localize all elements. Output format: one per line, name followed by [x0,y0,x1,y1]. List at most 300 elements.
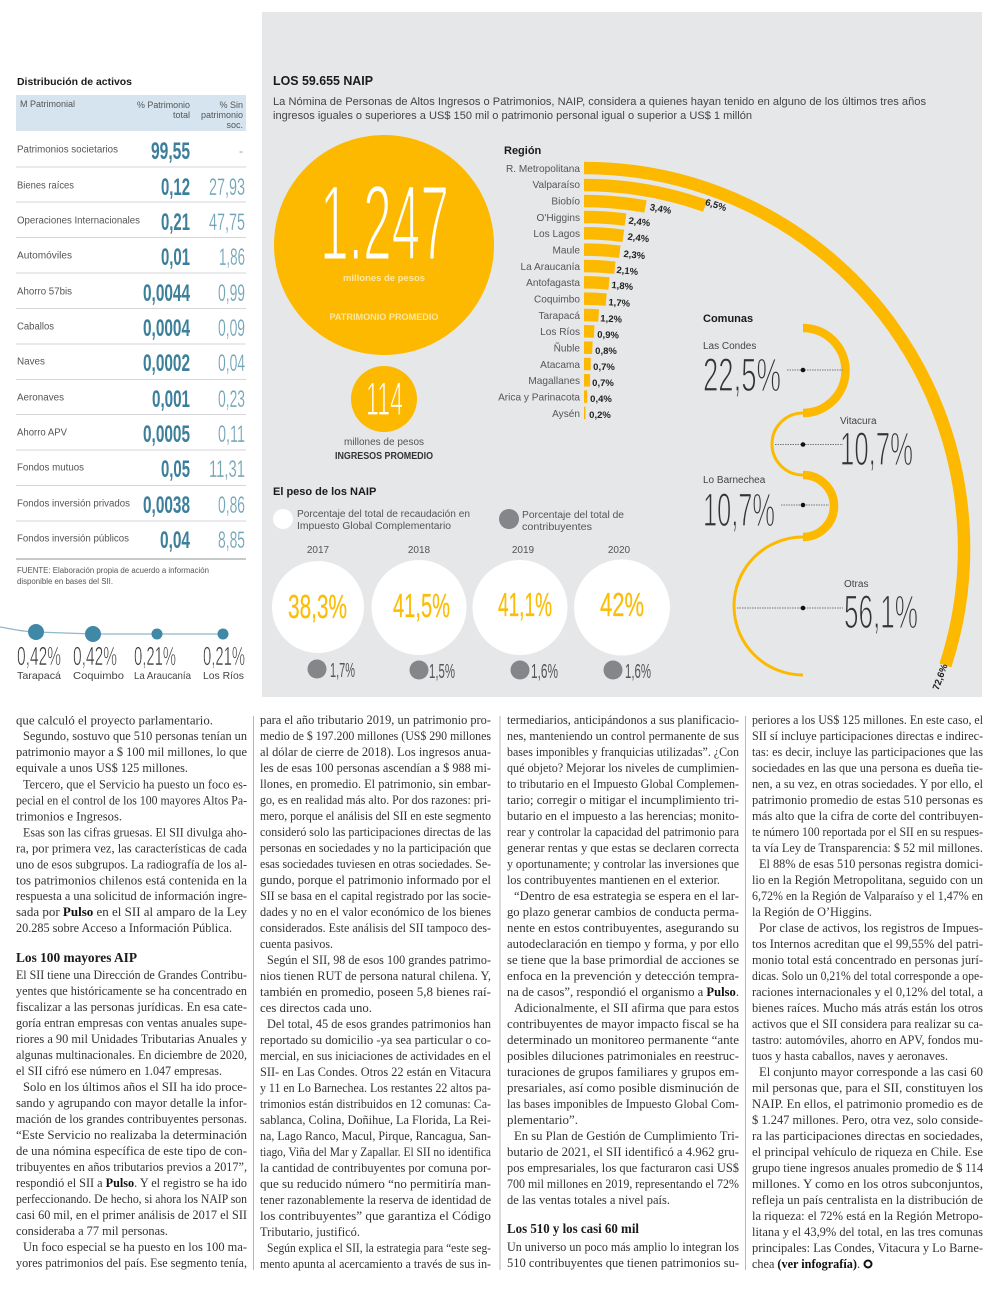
article column 3: butario de 2021, el SII identificó a 4.962 gru- [507,1144,739,1159]
article column 3: bases imponibles y franquicias utilizadas”. ¿Con [507,744,739,759]
article column 2: SII se basa en el capital registrado por las socie- [260,888,491,903]
year 2019 [472,545,568,683]
article column 1: Esas son las cifras gruesas. El SII divulga aho- [23,824,247,840]
small circle: ingresos promedio: 114 [366,372,403,425]
article column 2: considerados. Este análisis del SII tampoco des- [260,920,491,935]
article column 3: y oportunamente; y controlar las inversiones que [507,856,739,871]
region names [498,164,580,420]
article column 2: mercial, en sus iniciaciones de actividades en el [260,1048,491,1063]
row: Fondos inversión públicos: Fondos inversión públicos [17,533,129,544]
section: El peso de los NAIP [272,486,670,683]
article column 1: respuesta a una solicitud de información ingre- [16,888,247,903]
row: Fondos inversión privados: 0,0038 [143,492,190,519]
article column 3: qué objeto? Mejorar los niveles de cumplimien- [507,760,739,775]
article column 4: la Región de O’Higgins. [752,904,872,919]
big circle: patrimonio promedio [274,135,494,355]
article column 2: esas sociedades tuviesen en otras sociedades. Se- [260,856,491,871]
article column 4: raciones internacionales y el 0,12% del total, a [752,984,983,999]
region names: R. Metropolitana [506,164,580,175]
panel heading: LOS 59.655 NAIP [273,74,373,88]
row: Patrimonios societarios [17,138,243,165]
article column 2: sablanca, Colina, Doñihue, La Florida, La Rei- [260,1112,491,1127]
article column 4: refleja un país centralista en la distribución de [752,1192,983,1207]
article column 2: Del total, 45 de esos grandes patrimonios han [267,1016,491,1031]
article column 4: 6,72% en la Región de Valparaíso y el 1,47% en [752,888,983,903]
value and label: Los Ríos: 0,21% [203,641,245,671]
article column 1: que calculó el proyecto parlamentario. [16,712,213,728]
comuna: Otras [844,579,918,638]
row: Naves: 0,04 [218,350,245,377]
article column 1: yentes que históricamente se ha concentrado en [16,983,247,998]
region names: La Araucanía [520,262,580,273]
article column 4: SII sí incluye participaciones directas e indirec- [752,728,983,743]
row: Caballos: 0,0004 [143,315,190,342]
article column 3: Adicionalmente, el SII afirma que para estos [514,1000,739,1015]
row: Fondos inversión públicos [17,527,245,554]
row: Aeronaves: Aeronaves [17,392,64,403]
value and label: Tarapacá [17,641,61,682]
table header: soc. [226,120,243,130]
article column 4: la riqueza: el 72% está en la Región Metropo- [752,1208,983,1223]
year 2020: 2020 [608,545,631,556]
source note: FUENTE: Elaboración propia de acuerdo a información [17,566,209,575]
article column 1: patrimonio mayor a $ 100 mil millones, lo que [16,744,247,759]
article column 1: tribuyentes en años tributarios previos a 2017”, [16,1159,247,1174]
small circle: ingresos promedio: millones de pesos [344,436,424,448]
article column 2 [260,712,491,1271]
region percentages: 2,3% [623,249,646,262]
row: Operaciones Internacionales [17,209,245,236]
article column 1: Solo en los últimos años el SII ha ido proce- [23,1079,247,1094]
article column 1: “Este Servicio no realizaba la determinación [16,1127,247,1142]
table header: total [173,110,190,120]
row: Patrimonios societarios: Patrimonios societarios [17,144,118,155]
region percentages [589,197,951,692]
row: Aeronaves: 0,001 [152,386,190,413]
article column 3: rear y controlar la capacidad del patrimonio para [507,824,739,839]
article column 4: periores a los US$ 125 millones. En este caso, el [752,712,983,727]
article column 3: de las ventas totales a nivel país. [507,1192,670,1207]
row: Naves: Naves [17,356,45,367]
row: Ahorro APV: 0,0005 [143,421,190,448]
article column 2: que su reducido número “no permitiría man- [260,1176,491,1191]
article column 4: El conjunto mayor corresponde a las casi 60 [759,1064,983,1079]
region percentages: 0,7% [592,378,614,389]
row: Fondos mutuos: Fondos mutuos [17,462,84,473]
article column 1: fiscalizar a las personas jurídicas. En esa cate- [16,999,247,1014]
value and label: Coquimbo: 0,42% [73,641,117,671]
article column 3: termediarios, anticipándonos a sus planificacio- [507,712,739,727]
article column 1: mación de los grandes contribuyentes personas. [16,1111,247,1126]
year 2018: 41,5% [393,587,450,624]
article column 3: En su Plan de Gestión de Cumplimiento Tri- [514,1128,739,1143]
row: Fondos inversión privados: Fondos inversión privados [17,498,130,509]
region names: Los Lagos [533,229,580,240]
article column 1: sada por Pulso en el SII al amparo de la Ley [16,904,247,919]
legend: contribuyentes [499,509,624,533]
article column 4: mil personas que, para el SII, constituyen los [752,1080,983,1095]
region names: Aysén [552,409,580,420]
article column 2: medio de $ 197.200 millones (US$ 290 millones [260,728,491,743]
article column 3: “Dentro de esa estrategia se espera en el lar- [514,888,739,903]
article column 3: se tiene que la base primordial de acciones se [507,952,739,967]
row: Bienes raíces: Bienes raíces [17,180,74,191]
article column 3: posibles diluciones patrimoniales en reestruc- [507,1048,739,1063]
row: Patrimonios societarios: 99,55 [151,138,190,165]
article column 4: sociedades en las que una persona es dueña tie- [752,760,983,775]
article column 3: butario en el impuesto a las herencias; monito- [507,808,739,823]
region names: Biobío [551,196,580,208]
article column 3: turaciones de grupos familiares y grupos em- [507,1064,739,1079]
region names: Atacama [540,360,580,371]
panel intro text: La Nómina de Personas de Altos Ingresos o Patrimonios, NAIP, considera a quienes hayan tenido en alguno de los últimos tres años [273,96,926,108]
article column 2: reportado su domicilio -ya sea particular o co- [260,1032,491,1047]
section heading: El peso de los NAIP [273,486,376,498]
article column 3: 510 contribuyentes que tienen patrimonios su- [507,1255,739,1270]
row: Operaciones Internacionales: 0,21 [161,209,190,236]
article column 3 [507,712,739,1270]
chart: regions line fragment [0,624,245,682]
comuna: Vitacura: 10,7% [840,422,913,475]
article column 1: pecial en el control de los 100 mayores Altos Pa- [16,792,247,808]
article column 4: millones. Y como en los otros subconjuntos, [752,1176,983,1191]
value and label: Los Ríos [203,641,245,682]
row: Operaciones Internacionales: Operaciones Internacionales [17,215,140,226]
region percentages: 3,4% [649,202,673,217]
row: Ahorro APV: 0,11 [218,421,245,448]
row: Caballos: 0,09 [218,315,245,342]
row: Automóviles: 1,86 [219,244,245,271]
article column 4: más alto que la cifra de corte del contribuyen- [752,808,983,823]
table header: M Patrimonial [20,99,75,109]
subheading: Los 510 y los casi 60 mil: Los 510 y los casi 60 mil [507,1221,639,1236]
row: Bienes raíces: 0,12 [161,174,190,201]
row: Fondos inversión públicos: 0,04 [160,527,190,554]
article column 4 [752,712,983,1271]
region percentages: 1,8% [611,280,634,293]
article column 4: bienes raíces. Mucho más atrás están los otros [752,1000,983,1015]
region percentages: 0,4% [590,394,612,405]
source note [17,566,209,586]
article column 2: personas en sociedades y no la participación que [260,840,491,855]
comuna: Lo Barnechea [703,475,775,536]
article column 3: na de casos”, respondió el organismo a Pulso. [507,984,739,999]
article column 1: tos patrimonios chilenos está contenida en la [16,872,247,888]
year 2020 [574,545,670,683]
article column 2: na, Lago Ranco, Macul, Pirque, Rancagua, San- [260,1128,491,1143]
article column 3: pos empresariales, los que facturaron casi US$ [507,1160,739,1175]
article column 3: Un universo un poco más amplio lo integran los [507,1239,739,1254]
article column 3: los contribuyentes mantienen en el exterior. [507,872,720,887]
year 2019: 41,1% [498,586,552,623]
article column 3: nes, manteniendo un control permanente de sus [507,728,739,743]
article column 2: la cantidad de contribuyentes por comuna por- [260,1160,491,1175]
article column 1: algunas multinacionales. En diciembre de 2020, [16,1047,247,1062]
article column 3: tario; corregir o mitigar el incumplimiento tri- [507,792,739,807]
region names: Tarapacá [538,311,580,322]
article column 1: Tercero, que el Servicio ha puesto un foco es- [23,776,247,792]
article column 1 [16,712,247,1270]
article column 4: tas: es decir, incluye las participaciones que las [752,744,983,759]
row: Fondos mutuos [17,456,245,483]
article column 4: litana y el 43,9% del total, en las tres comunas [752,1224,983,1239]
article column 1: equivale a unos US$ 125 millones. [16,760,188,775]
article column 2: SII- en Las Condes. Otros 22 están en Vitacura [260,1064,491,1079]
article column 3: presariales, así como posible disminución de [507,1080,739,1095]
table header: % Patrimonio [137,100,190,110]
region percentages: 6,5% [704,197,728,214]
row: Naves [17,350,245,377]
article column 2: para el año tributario 2019, un patrimonio pro- [260,712,491,727]
value and label: Tarapacá: Tarapacá [17,670,61,682]
article column 2: cuenta pasivos. [260,936,333,951]
year 2019: 2019 [512,545,535,556]
row: Aeronaves [17,386,245,413]
year 2018: 2018 [408,545,431,556]
article column 2: go, es en realidad más alto. Por dos razones: pri- [260,792,491,807]
chart heading: Región: Región [504,145,542,157]
region names: Coquimbo [534,294,580,306]
article column 2: al dólar de cierre de 2018). Los ingresos anua- [260,744,491,759]
article column 4: patrimonio promedio de estas 510 personas es [752,792,983,807]
legend: recaudación: Porcentaje del total de recaudación en [297,509,470,520]
article column 4: chea (ver infografía). [752,1256,860,1271]
value and label: Tarapacá: 0,42% [17,641,61,671]
article column 1: uno de esos subgrupos. La radiografía de los al- [16,856,247,872]
article column 4: activos que el SII considera para realizar su ca- [752,1016,983,1031]
row: Naves: 0,0002 [143,350,190,377]
article column 3: 700 mil millones en 2019, representando el 72% [507,1176,739,1191]
row: Ahorro 57bis [17,280,245,307]
region percentages: 2,1% [616,265,639,278]
small circle: ingresos promedio: INGRESOS PROMEDIO [335,451,433,462]
row: Caballos: Caballos [17,321,54,332]
row: Ahorro 57bis: 0,0044 [143,280,190,307]
chart heading: Comunas: Comunas [703,313,753,325]
comuna: Vitacura: Vitacura [840,416,877,427]
article column 1: sando y agrupando con mayor detalle la infor- [16,1095,247,1110]
article column 4: NAIP. En ellos, el patrimonio promedio es de [752,1096,983,1111]
article column 2: ces directos cada uno. [260,1000,372,1015]
article column 1: riores a 90 mil Unidades Tributarias Anuales y [16,1031,247,1046]
year 2018: 1,5% [429,661,455,683]
article column 3: enfoca en la prevención y detección tempra- [507,968,739,983]
article column 4: grupo tiene ingresos anuales promedio de $ 114 [752,1160,983,1175]
row: Automóviles: 0,01 [161,244,190,271]
small circle: ingresos promedio [335,366,433,462]
comuna: Otras: 56,1% [844,585,918,638]
article column 4: ta vía Ley de Transparencia: $ 52 mil millones. [752,840,983,855]
article column 1: 20.285 sobre Acceso a Información Pública. [16,920,232,935]
article column 4: principales: Las Condes, Vitacura y Lo Barne- [752,1240,983,1255]
row: Automóviles: Automóviles [17,250,72,261]
region percentages: 72,6% [931,662,951,692]
row: Fondos inversión públicos: 8,85 [218,527,245,554]
article column 2: trimonios están distribuidos en 12 comunas: Ca- [260,1096,491,1111]
article column 4: El 88% de esas 510 personas registra domici- [759,856,983,871]
article column 2: gundo, porque el patrimonio informado por el [260,872,491,887]
comuna: Vitacura [840,416,913,475]
article column 4: $ 1.247 millones. Pero, otra vez, solo conside- [752,1112,983,1127]
region names: Antofagasta [526,278,580,289]
article column 1: Un foco especial se ha puesto en los 100 ma- [23,1239,247,1254]
article column 3: contribuyentes de mayor impacto fiscal se ha [507,1016,739,1031]
region percentages: 1,7% [608,297,631,310]
row: Ahorro 57bis: Ahorro 57bis [17,286,72,297]
table header: patrimonio [201,110,243,120]
article column 2: consideró solo las participaciones directas de las [260,824,491,839]
region names: Valparaíso [532,180,580,191]
region percentages: 2,4% [627,232,650,245]
article column 4: Por clase de activos, los registros de Impues- [759,920,983,935]
article column 1: ra, por primera vez, las características de cada [16,840,247,856]
year 2020: 42% [600,586,644,623]
row: Ahorro 57bis: 0,99 [218,280,245,307]
region percentages: 0,7% [593,362,615,373]
article column 4: monio total está concentrado en personas jurí- [752,952,983,967]
comuna: Las Condes: Las Condes [703,341,756,352]
article column 1: trimonios e Ingresos. [16,808,122,824]
row: Ahorro APV: Ahorro APV [17,427,67,438]
article column 2: también en promedio, poseen 5,8 bienes raí- [260,984,491,999]
article column 1: Segundo, sostuvo que 510 personas tenían un [23,728,247,743]
chart: regions radial bars [498,145,964,692]
article column 2: mento apunta al acercamiento a través de sus in- [260,1256,491,1271]
article column 2: y 11 en Lo Barnechea. Los restantes 22 altos pa- [260,1080,491,1095]
region percentages: 1,2% [600,313,623,326]
big circle: patrimonio promedio: PATRIMONIO PROMEDIO [330,312,438,323]
year 2017: 38,3% [288,588,347,625]
article column 2: Según el SII, 98 de esos 100 grandes patrimo- [267,952,491,967]
year 2017: 2017 [307,545,330,556]
row: Bienes raíces: 27,93 [209,174,245,201]
region names: Ñuble [554,342,580,354]
article column 4: tastro: automóviles, ahorro en APV, fondos mu- [752,1032,983,1047]
region percentages: 0,9% [597,330,620,341]
article column 3: autodeclaración en tiempo y forma, y por ello [507,936,739,951]
big circle: patrimonio promedio: millones de pesos [343,273,425,284]
article column 2: les de esas 100 personas ascendían a $ 988 mi- [260,760,491,775]
article column 3: las bases imponibles de Impuesto Global Com- [507,1096,739,1111]
article column 3: generar rentas y que estas se declaren correcta [507,840,739,855]
article column 4: lio en la Región Metropolitana, seguido con un [752,872,983,887]
table title: Distribución de activos [17,76,132,88]
comuna: Lo Barnechea: 10,7% [703,483,775,536]
article column 1: yores patrimonios del país. Ese segmento tenía, [16,1255,247,1270]
row: Aeronaves: 0,23 [218,386,245,413]
row: Patrimonios societarios: - [239,144,243,158]
article column 1: el SII cifró ese número en 1.047 empresas. [16,1063,222,1078]
year 2020: 1,6% [625,661,651,683]
panel intro text: ingresos iguales o superiores a US$ 150 mil o patrimonio personal igual o superior a US$ 1 millón [273,110,752,122]
row: Caballos [17,315,245,342]
article column 2: llones, en promedio. El patrimonio, sin embar- [260,776,491,791]
article column 1: casi 60 mil, en el primer análisis de 2017 el SII [16,1207,247,1222]
comuna: Otras: Otras [844,579,868,590]
comuna: Lo Barnechea: Lo Barnechea [703,475,766,486]
table header: % Sin [219,100,243,110]
comuna: Las Condes [703,341,781,401]
article column 2: tiago, Viña del Mar y Zapallar. El SII no identifica [260,1144,491,1159]
year 2017: 1,7% [330,660,355,682]
big circle: patrimonio promedio: 1.247 [320,162,449,283]
legend: recaudación: Impuesto Global Complementario [297,521,451,532]
row: Operaciones Internacionales: 47,75 [209,209,245,236]
legend: recaudación [273,509,470,532]
legend: contribuyentes: Porcentaje del total de [522,510,624,521]
article column 4: nen, a su vez, en otras sociedades. Y por ello, el [752,776,983,791]
icon: end mark [864,1260,872,1268]
article column 2: dades y no en el valor económico de los bienes [260,904,491,919]
region names: Magallanes [528,376,580,387]
article column 2: Tributario, justificó. [260,1224,360,1239]
article column 3: go plazo generar cambios de conducta perma- [507,904,739,919]
region names: Arica y Parinacota [498,392,580,404]
subheading: Los 100 mayores AIP: Los 100 mayores AIP [16,950,137,965]
article column 1: consideraba a 77 mil personas. [16,1223,168,1238]
year 2018 [372,545,466,683]
value and label: La Araucanía: La Araucanía [134,670,191,682]
article column 2: mero, porque el análisis del SII en este segmento [260,808,491,823]
article column 2: Según explica el SII, la estrategia para “este seg- [267,1240,491,1255]
value and label: Coquimbo [73,641,124,682]
region percentages: 2,4% [628,216,651,229]
article column 1: goría entran empresas con ventas anuales supe- [16,1015,247,1030]
value and label: La Araucanía: 0,21% [134,641,176,671]
row: Fondos mutuos: 11,31 [209,456,245,483]
year 2019: 1,6% [531,661,558,683]
row: Ahorro APV [17,421,245,448]
article column 2: nios tienen RUT de persona natural chilena. Y, [260,968,491,983]
region names: Maule [552,246,580,256]
region names: Los Ríos [540,327,580,338]
year 2017 [272,545,364,682]
article column 1: El SII tiene una Dirección de Grandes Contribu- [16,967,247,982]
value and label: Coquimbo: Coquimbo [73,670,124,682]
article column 1: perfeccionando. De hecho, si ahora los NAIP son [16,1191,247,1206]
row: Fondos inversión privados [17,492,245,519]
article column 4: ra las participaciones directas en sociedades, [752,1128,983,1143]
article column 3: nente en estos contribuyentes, asegurando su [507,920,739,935]
legend: contribuyentes: contribuyentes [522,522,592,533]
row: Bienes raíces [17,174,245,201]
panel intro text [273,96,926,122]
region names: O'Higgins [537,213,580,224]
panel: Los 59.655 NAIP [262,12,982,697]
article column 3: determinado un monitoreo permanente “ante [507,1032,739,1047]
source note: disponible en bases del SII. [17,577,113,586]
value and label: Los Ríos: Los Ríos [203,670,244,682]
article column 2: tener razonablemente la reserva de identidad de [260,1192,491,1207]
article column 4: el principal vehículo de riqueza en Chile. Ese [752,1144,983,1159]
region percentages: 0,8% [595,346,617,357]
row: Automóviles [17,244,245,271]
region percentages: 0,2% [589,410,611,421]
chart: comunas S-curve [703,313,918,675]
comuna: Las Condes: 22,5% [703,348,781,401]
article column 4: tos Internos acreditan que el 99,55% del patri- [752,936,983,951]
article column 1: de una nómina específica de este tipo de con- [16,1143,247,1158]
row: Fondos inversión privados: 0,86 [218,492,245,519]
article column 3: plementario”. [507,1112,578,1127]
value and label: La Araucanía [134,641,191,682]
panel: asset distribution table [16,76,246,586]
article column 4: tuos y hasta caballos, naves y aeronaves. [752,1048,948,1063]
table header [16,95,246,131]
article column 1: respondió el SII a Pulso. Y el registro se ha ido [16,1175,247,1190]
row: Fondos mutuos: 0,05 [161,456,190,483]
article column 2: los contribuyentes” que garantiza el Código [260,1208,491,1223]
